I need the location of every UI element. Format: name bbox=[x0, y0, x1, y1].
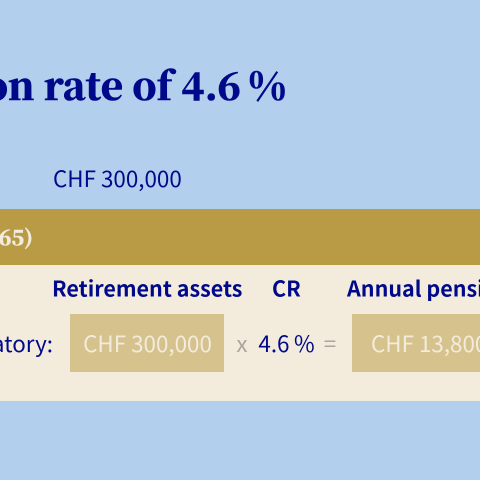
box: retirement assets value: CHF 300,000 bbox=[83, 327, 212, 359]
panel: calculation bbox=[0, 209, 480, 401]
conversion rate value: 4.6 % bbox=[258, 327, 315, 359]
top assets amount: CHF 300,000 bbox=[53, 162, 182, 194]
box: retirement assets value bbox=[70, 314, 224, 372]
column heading: retirement assets: Retirement assets bbox=[52, 272, 242, 304]
box: annual pension value bbox=[352, 314, 480, 372]
multiply sign: x bbox=[236, 327, 248, 359]
equals sign: = bbox=[324, 327, 336, 359]
header band bbox=[0, 209, 480, 265]
panel background bbox=[0, 265, 480, 401]
column heading: CR: CR bbox=[272, 272, 301, 304]
